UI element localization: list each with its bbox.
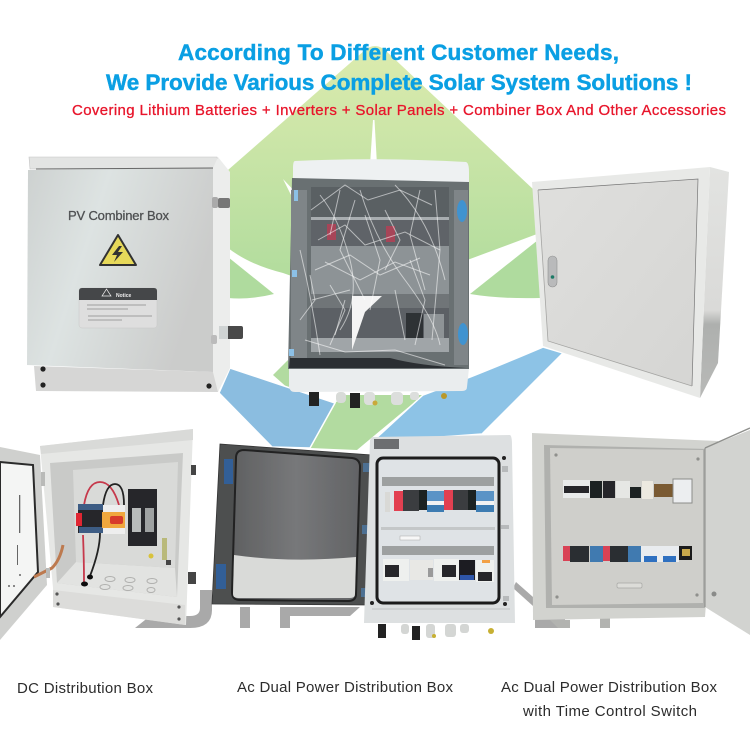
lid [29,157,219,169]
corner screws [370,456,507,606]
icon: high voltage warning [100,235,136,265]
white spike left [283,179,300,205]
door [288,178,469,369]
door lock [548,256,557,287]
top breaker row [563,479,692,503]
film reflection [352,296,382,350]
body [40,429,193,625]
door panel [232,450,360,601]
right small green ray [470,240,540,298]
door print [8,495,21,587]
bottom flange [53,590,185,625]
door hinges [216,459,373,597]
back plate [550,448,703,605]
back plate [73,462,178,568]
frame [532,167,710,398]
plastic wrinkles [300,185,445,365]
rotary switch [102,505,125,534]
isolator module [76,504,103,533]
door [538,179,698,386]
caption: AC dual power distribution box: Ac Dual Power Distribution Box [237,679,454,696]
door face [0,462,38,617]
side clips [501,466,509,601]
screws [40,366,212,389]
breaker detail [424,314,444,338]
caption: AC dual power box with time control: Ac Dual Power Distribution Box [501,679,718,696]
cavity [50,453,183,597]
hinges and latch [211,197,243,344]
product: enclosure with plastic film [288,159,469,408]
wires [83,482,124,582]
floor [57,562,177,597]
door bottom fold [289,358,466,368]
product: AC dual power box with time control switch [532,428,750,635]
body [364,435,515,623]
bottom cap line [372,608,510,610]
body [532,433,718,620]
red switches [327,224,336,240]
bottom breaker row [563,546,692,562]
background: green and blue rays [219,46,563,450]
top row [381,477,495,530]
top cap [293,159,469,184]
door [27,168,213,372]
subtitle: Covering Lithium Batteries + Inverters + Solar Panels + Combiner Box And Other Accessories [72,102,726,119]
right hinge column [454,190,468,365]
door hinges [41,472,50,578]
watermark bars behind lower products [135,582,610,628]
product: PV combiner box [27,157,243,392]
title: According To Different Customer Needs, [178,40,619,65]
logo tag [374,439,399,449]
title: We Provide Various Complete Solar System Solutions ! [106,70,692,95]
screws [55,592,181,621]
lid edge [40,429,193,454]
caption: AC dual power box with time control: with Time Control Switch [522,703,697,720]
product: metal cabinet closed [532,167,729,398]
plate handle [617,583,642,588]
door lower white area [233,555,356,598]
caption: AC dual power box with time control [501,679,718,720]
blue left ray [219,368,335,448]
latch [188,572,196,584]
product: AC dual power box with open door [212,435,515,640]
top green ray [228,46,537,300]
product: DC distribution box open [0,429,196,640]
bottom flange [34,366,218,392]
legs [550,620,570,628]
inner panel [311,187,449,347]
notice label [79,288,157,328]
blue right ray [372,347,563,442]
caption: DC distribution box: DC Distribution Box [17,680,154,697]
bottom row [382,536,494,582]
left small green ray [228,257,274,298]
door lock [712,592,716,596]
door [0,447,47,640]
side [700,167,729,398]
bottom glands [309,392,447,408]
door [705,430,750,635]
white slit top [370,120,377,165]
recess [544,445,708,608]
left hinge column [291,190,307,365]
door label: PV Combiner Box [68,208,170,223]
plate screws [554,453,700,599]
terminal block [148,538,171,565]
left clips [289,190,298,356]
bottom cap [289,368,469,392]
door [212,444,372,605]
copper strap [34,545,63,577]
gasket [377,458,499,603]
glands [378,624,494,640]
center green ray [273,360,423,450]
notice label: Notice [116,293,132,299]
side latch [191,465,196,475]
surge modules [128,489,157,546]
knockouts [100,576,157,592]
glands [81,582,88,586]
title [106,40,692,95]
blue knobs [457,200,467,222]
side [213,157,230,392]
